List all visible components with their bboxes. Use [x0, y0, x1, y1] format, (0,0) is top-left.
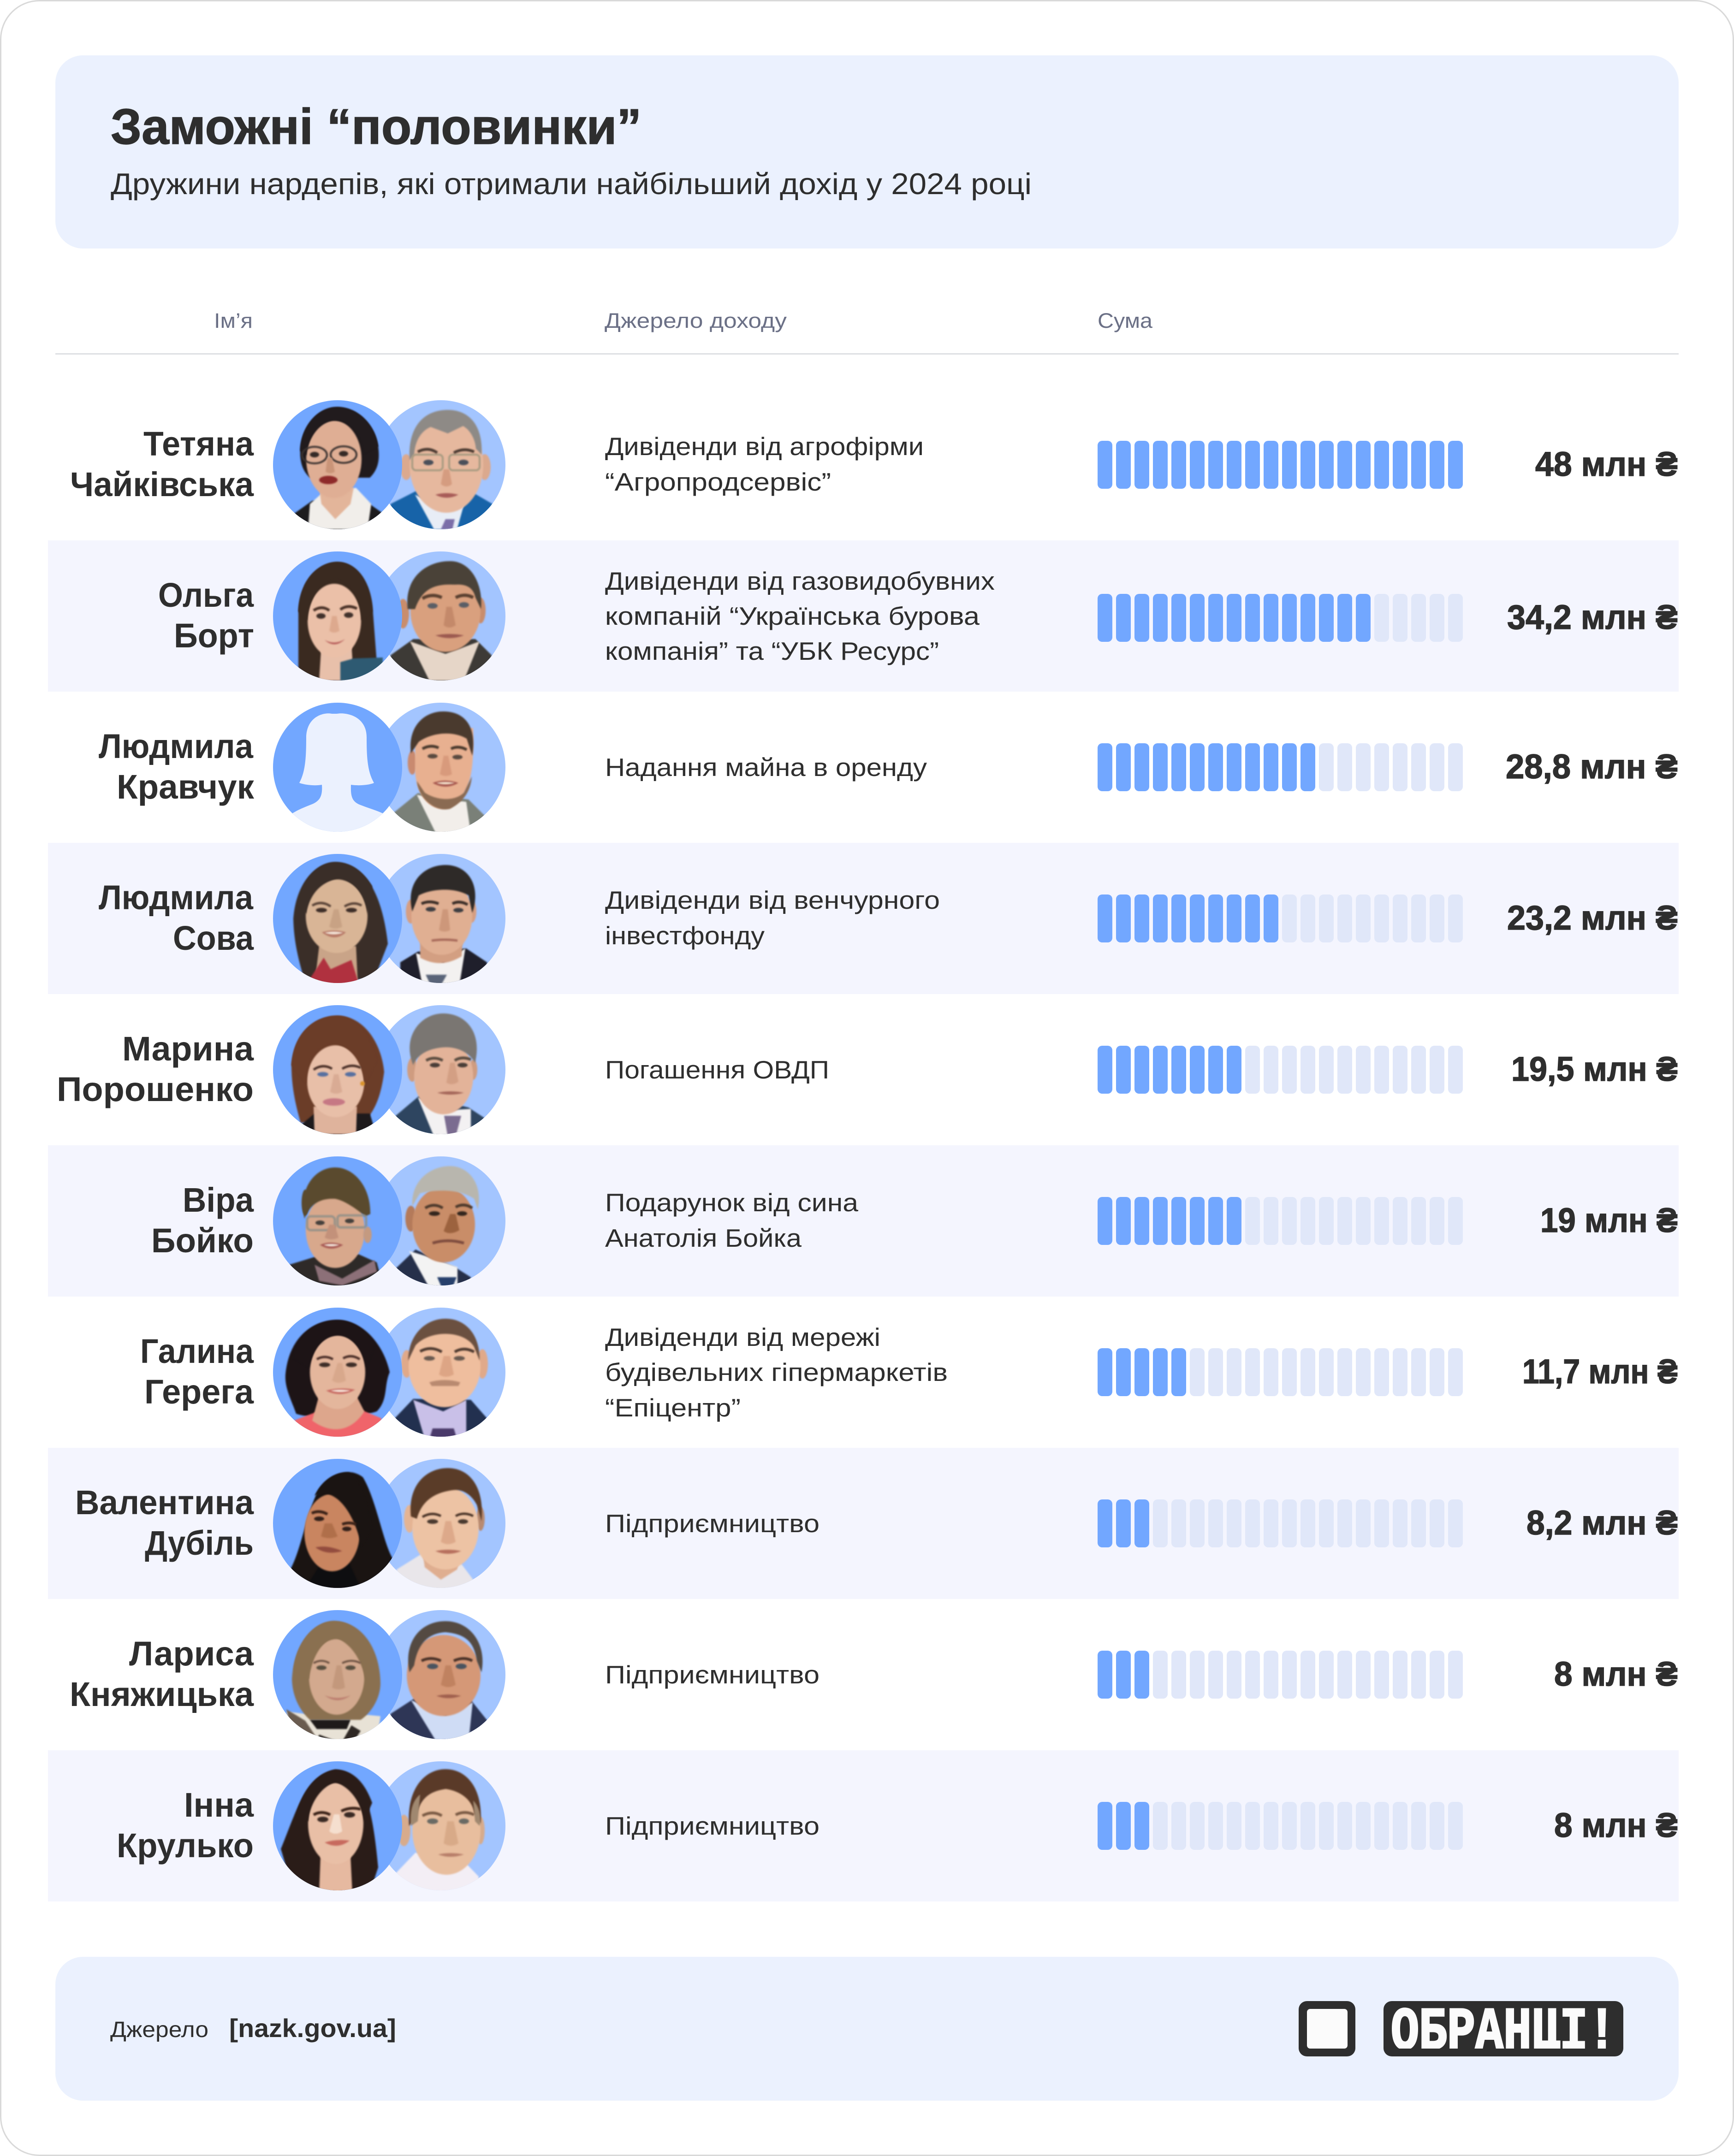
- name: Лариса: [129, 1635, 254, 1673]
- name: [140, 1332, 254, 1411]
- name: [75, 1483, 254, 1562]
- amount: 48 млн ₴: [1535, 445, 1678, 483]
- photo: wife: [273, 1761, 402, 1893]
- name: Ольга: [158, 576, 254, 614]
- amount: 34,2 млн ₴: [1507, 598, 1678, 636]
- column heading: amount: Сума: [1098, 309, 1153, 332]
- amount bar: [1098, 1802, 1463, 1850]
- name: Галина: [140, 1332, 254, 1370]
- photo: husband: [376, 1761, 505, 1893]
- amount bar: [1098, 594, 1463, 642]
- photo: wife: [273, 854, 402, 985]
- income source: компаній “Українська бурова: [605, 602, 980, 630]
- row 10: Крулько: [117, 1761, 1678, 1893]
- row 6: Бойко: [151, 1156, 1678, 1288]
- photo: husband: [376, 1459, 505, 1590]
- row 8: Дубіль: [75, 1459, 1678, 1590]
- amount: 8,2 млн ₴: [1526, 1504, 1678, 1542]
- income source: Підприємництво: [605, 1812, 819, 1840]
- amount bar: [1098, 743, 1463, 791]
- amount: 8 млн ₴: [1554, 1806, 1678, 1844]
- name: Чайківська: [70, 465, 254, 503]
- amount bar: [1098, 1499, 1463, 1547]
- photo: wife: [273, 1308, 402, 1439]
- row 2: Борт: [158, 551, 1678, 683]
- name: Порошенко: [57, 1070, 254, 1108]
- income source: будівельних гіпермаркетів: [605, 1358, 948, 1386]
- header panel: [55, 55, 1679, 249]
- income source: компанія” та “УБК Ресурс”: [605, 637, 939, 665]
- photo: wife: [273, 1610, 402, 1741]
- income source: Погашення ОВДП: [605, 1055, 829, 1084]
- name: Герега: [144, 1373, 254, 1411]
- subtitle: Дружини нардепів, які отримали найбільший дохід у 2024 році: [111, 167, 1032, 201]
- photo: husband: [389, 551, 505, 681]
- logo: square mark: [1299, 2001, 1355, 2056]
- name: Сова: [173, 919, 254, 957]
- name: [158, 576, 254, 655]
- name: Дубіль: [145, 1524, 254, 1562]
- name: Віра: [183, 1181, 254, 1219]
- amount bar: [1098, 1197, 1463, 1245]
- income source: [605, 567, 995, 665]
- name: Людмила: [99, 727, 254, 765]
- photo: wife: [273, 551, 402, 681]
- photo: husband: [376, 400, 505, 529]
- photo: wife: [273, 1156, 402, 1288]
- amount: 28,8 млн ₴: [1506, 747, 1678, 786]
- name: [70, 425, 254, 503]
- name: [70, 1635, 254, 1713]
- photo: wife: [273, 1005, 402, 1137]
- amount bar: [1098, 441, 1463, 489]
- amount: 19 млн ₴: [1540, 1201, 1678, 1239]
- name: Крулько: [117, 1826, 254, 1865]
- photo: husband: [376, 854, 505, 985]
- income source: Дивіденди від венчурного: [605, 886, 940, 914]
- income source: “Агропродсервіс”: [605, 468, 831, 496]
- name: Кравчук: [117, 768, 255, 806]
- row 3: Кравчук: [99, 703, 1678, 836]
- income source: Дивіденди від мережі: [605, 1323, 880, 1351]
- income source: [605, 1188, 858, 1252]
- row 1: Чайківська: [70, 400, 1678, 532]
- photo: wife: [273, 1459, 402, 1590]
- row 4: Сова: [99, 854, 1678, 985]
- source label: Джерело: [110, 2018, 208, 2042]
- amount bar: [1098, 1348, 1463, 1396]
- name: Тетяна: [143, 425, 254, 463]
- name: [99, 727, 255, 806]
- income source: Анатолія Бойка: [605, 1224, 802, 1252]
- photo: husband: [376, 1308, 505, 1439]
- income source: [605, 886, 940, 950]
- table header: [214, 309, 1153, 332]
- name: [57, 1030, 254, 1108]
- photo: wife: [273, 400, 402, 532]
- column heading: name: Ім’я: [214, 309, 253, 332]
- income source: Дивіденди від газовидобувних: [605, 567, 995, 595]
- income source: Підприємництво: [605, 1660, 819, 1689]
- photo: husband: [376, 1156, 505, 1288]
- income source: [605, 432, 924, 496]
- name: Борт: [174, 616, 254, 655]
- photo: wife (silhouette): [273, 703, 402, 836]
- income source: Подарунок від сина: [605, 1188, 858, 1217]
- income source: Підприємництво: [605, 1509, 819, 1538]
- name: Марина: [122, 1030, 254, 1068]
- income source: [605, 1323, 948, 1422]
- logo: wordmark: ОБРАНЦІ!: [1391, 1999, 1616, 2067]
- name: Княжицька: [70, 1675, 254, 1713]
- row bands: [48, 540, 1679, 1901]
- amount: 19,5 млн ₴: [1511, 1050, 1678, 1088]
- source value: [nazk.gov.ua]: [229, 2014, 396, 2043]
- name: [99, 878, 254, 957]
- name: [117, 1786, 254, 1865]
- income source: Дивіденди від агрофірми: [605, 432, 924, 461]
- name: Бойко: [151, 1221, 254, 1260]
- name: Людмила: [99, 878, 254, 917]
- photo: husband: [376, 1005, 505, 1137]
- column heading: income source: Джерело доходу: [605, 309, 787, 332]
- footer panel: [55, 1957, 1679, 2101]
- amount bar: [1098, 1651, 1463, 1699]
- photo: husband: [389, 703, 505, 832]
- amount: 8 млн ₴: [1554, 1655, 1678, 1693]
- amount bar: [1098, 1046, 1463, 1094]
- row 9: Княжицька: [70, 1610, 1678, 1741]
- row 5: Порошенко: [57, 1005, 1678, 1137]
- income source: інвестфонду: [605, 921, 765, 950]
- row 7: Герега: [140, 1308, 1678, 1439]
- photo: husband: [376, 1610, 505, 1741]
- amount: 23,2 млн ₴: [1507, 899, 1678, 937]
- title: Заможні “половинки”: [111, 99, 641, 155]
- income source: “Епіцентр”: [605, 1393, 741, 1422]
- amount bar: [1098, 894, 1463, 942]
- income source: Надання майна в оренду: [605, 753, 927, 782]
- name: Інна: [184, 1786, 254, 1824]
- name: [151, 1181, 254, 1260]
- amount: 11,7 млн ₴: [1522, 1352, 1678, 1391]
- name: Валентина: [75, 1483, 254, 1522]
